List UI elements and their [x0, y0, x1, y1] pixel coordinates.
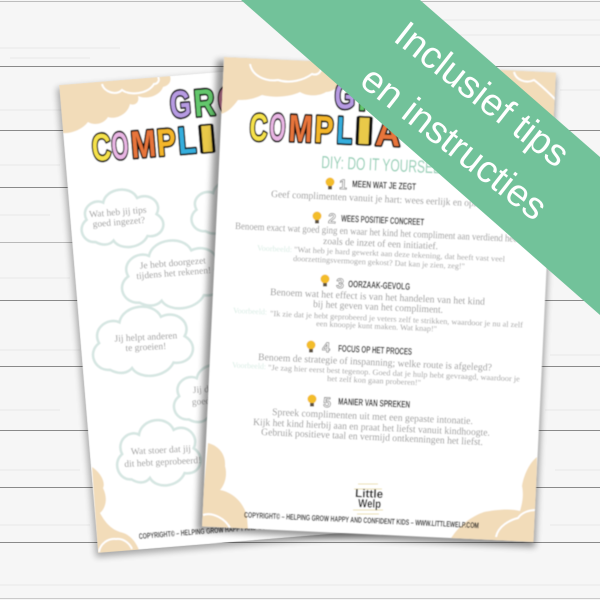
- back title: complimenten: P: [155, 122, 178, 165]
- front title: complimenten: M: [288, 108, 313, 151]
- back bottom-left cloud decoration: [92, 467, 139, 553]
- tip 2: "Wat heb je hard gewerkt aan deze tekening, dat heeft vast veel: [294, 245, 506, 264]
- cloud: wat stoer: dit hebt geprobeerd!: [124, 456, 202, 470]
- tip 4: FOCUS OP HET PROCES: [338, 344, 412, 358]
- back title: complimenten: I: [196, 118, 218, 161]
- tip 4: het zelf kon gaan proberen!": [327, 374, 421, 387]
- icon: light bulb 1: [326, 178, 334, 190]
- tip 3: een knoopje kunt maken. Wat knap!": [316, 319, 437, 333]
- tip 3: [233, 274, 523, 333]
- tip 4: [232, 339, 521, 387]
- cloud: partly hidden by front sheet: goed: [192, 397, 211, 408]
- back title: complimenten: [90, 86, 224, 164]
- tip 4: 4: [322, 339, 331, 355]
- cloud: doorgezet tijdens het rekenen: [120, 238, 215, 310]
- cloud: anderen te groeien: te groeien!: [125, 342, 167, 354]
- logo: Little Welp: Welp: [358, 498, 381, 511]
- heading: DIY: DIY: DO IT YOURSELF: [321, 152, 448, 178]
- logo: Little Welp: [352, 482, 384, 514]
- front title: complimenten: C: [249, 107, 268, 150]
- icon: light bulb 4: [306, 340, 316, 352]
- tip 3: OORZAAK-GEVOLG: [348, 279, 410, 293]
- tip 2: WEES POSITIEF CONCREET: [341, 214, 424, 228]
- back top-left cloud decoration: [59, 76, 171, 133]
- tip 5: Kijk het kind hierbij aan en praat het liefst vanuit kindhoogte.: [253, 417, 490, 439]
- tip 2: 2: [328, 210, 337, 226]
- cloud: tips goed ingezet: Wat heb jij tips: [89, 206, 147, 220]
- panel: back worksheet: [59, 72, 344, 553]
- tip 2: Voorbeeld:: [257, 244, 292, 254]
- cloud: partly hidden by front sheet: [172, 364, 210, 424]
- back copyright line: COPYRIGHT© – HELPING GROW HAPPY AND CONFIDENT KIDS – WWW.LITTLEWELP.COM: [138, 514, 374, 541]
- front title: complimenten: A: [375, 112, 401, 155]
- front top-right cloud decoration: [500, 70, 556, 117]
- banner: inclusief tips en instructies: en instructies: [352, 58, 555, 229]
- front bottom-right cloud decoration: [450, 457, 537, 545]
- logo: Little Welp: Little: [355, 488, 383, 501]
- tip 5: 5: [323, 394, 332, 410]
- back title: complimenten: M: [129, 123, 158, 167]
- tip 5: MANIER VAN SPREKEN: [338, 397, 410, 411]
- icon: light bulb 5: [308, 394, 316, 406]
- front title: complimenten: [249, 75, 401, 155]
- back title: complimenten: C: [90, 127, 113, 170]
- front sheet shadow: [197, 60, 556, 547]
- back title: complimenten: G: [168, 83, 193, 127]
- back title: complimenten: O: [110, 125, 130, 168]
- tip 4: Benoem de strategie of inspanning; welke route is afgelegd?: [258, 352, 493, 374]
- cloud: doorgezet tijdens het rekenen: tijdens het rekenen!: [136, 266, 212, 282]
- front copyright line: COPYRIGHT© – HELPING GROW HAPPY AND CONFIDENT KIDS – WWW.LITTLEWELP.COM: [244, 511, 479, 530]
- cloud: wat stoer: [114, 417, 203, 489]
- tip 1: 1: [339, 176, 348, 192]
- banner: inclusief tips en instructies: [241, 0, 600, 315]
- cloud: wat stoer: Wat stoer dat jij: [131, 444, 191, 458]
- tip 3: 3: [336, 275, 345, 291]
- cloud: tips goed ingezet: [79, 186, 165, 251]
- banner: inclusief tips en instructies: Inclusief tips: [386, 14, 577, 176]
- tip 1: Geef complimenten vanuit je hart: wees eerlijk en oprecht: [271, 189, 493, 210]
- tip 1: [271, 176, 493, 210]
- front title: complimenten: I: [354, 111, 374, 153]
- icon: light bulb 2: [312, 212, 322, 224]
- tip 2: Benoem exact wat goed ging en waar het kind het compliment aan verdiend heeft,: [235, 221, 525, 245]
- back sheet shadow: [57, 61, 431, 557]
- tip 1: MEEN WAT JE ZEGT: [352, 179, 416, 193]
- tip 3: bij het geven van het compliment.: [313, 299, 443, 316]
- tip 5: Spreek complimenten uit met een gepaste intonatie.: [272, 407, 473, 427]
- icon: light bulb 3: [320, 274, 330, 286]
- front title: complimenten: P: [314, 109, 334, 152]
- cloud: partly hidden by front sheet: Jij doet: [193, 384, 221, 396]
- tip 4: Voorbeeld:: [232, 361, 266, 371]
- front top-left cloud decoration: [221, 57, 345, 114]
- tip 2: [235, 210, 525, 271]
- front title: complimenten: G: [334, 75, 356, 118]
- front title: complimenten: O: [269, 107, 286, 150]
- cloud: tips goed ingezet: goed ingezet?: [92, 216, 145, 230]
- tip 3: Benoem wat het effect is van het handelen van het kind: [270, 287, 485, 308]
- panel: front instruction sheet: [200, 57, 558, 545]
- back title: complimenten: L: [176, 120, 198, 163]
- front title: complimenten: R: [358, 77, 380, 120]
- front title: complimenten: L: [336, 110, 353, 153]
- cloud: anderen te groeien: Jij helpt anderen: [114, 331, 178, 345]
- tip 3: Voorbeeld:: [233, 306, 267, 317]
- tip 5: Gebruik positieve taal en vermijd ontkenningen het liefst.: [261, 427, 483, 448]
- tip 5: [253, 394, 490, 448]
- back title: complimenten: O: [216, 79, 241, 123]
- cloud: top right partly hidden: [190, 184, 218, 235]
- cloud: doorgezet tijdens het rekenen: Je hebt doorgezet: [139, 256, 207, 272]
- tip 2: zoals de inzet of een initiatief.: [323, 236, 438, 252]
- tip 3: "Ik zie dat je hebt geprobeerd je veters zelf te strikken, waardoor je nu al zelf: [270, 309, 523, 329]
- front bottom-left cloud decoration: [200, 443, 248, 530]
- tip 4: "Je zag hier eerst best tegenop. Goed dat je hulp hebt gevraagd, waardoor je: [268, 363, 521, 383]
- tip 2: doorzettingsvermogen gekost? Dat kan je zien, zeg!": [293, 254, 465, 271]
- cloud: anderen te groeien: [89, 303, 195, 380]
- back title: complimenten: R: [192, 82, 217, 125]
